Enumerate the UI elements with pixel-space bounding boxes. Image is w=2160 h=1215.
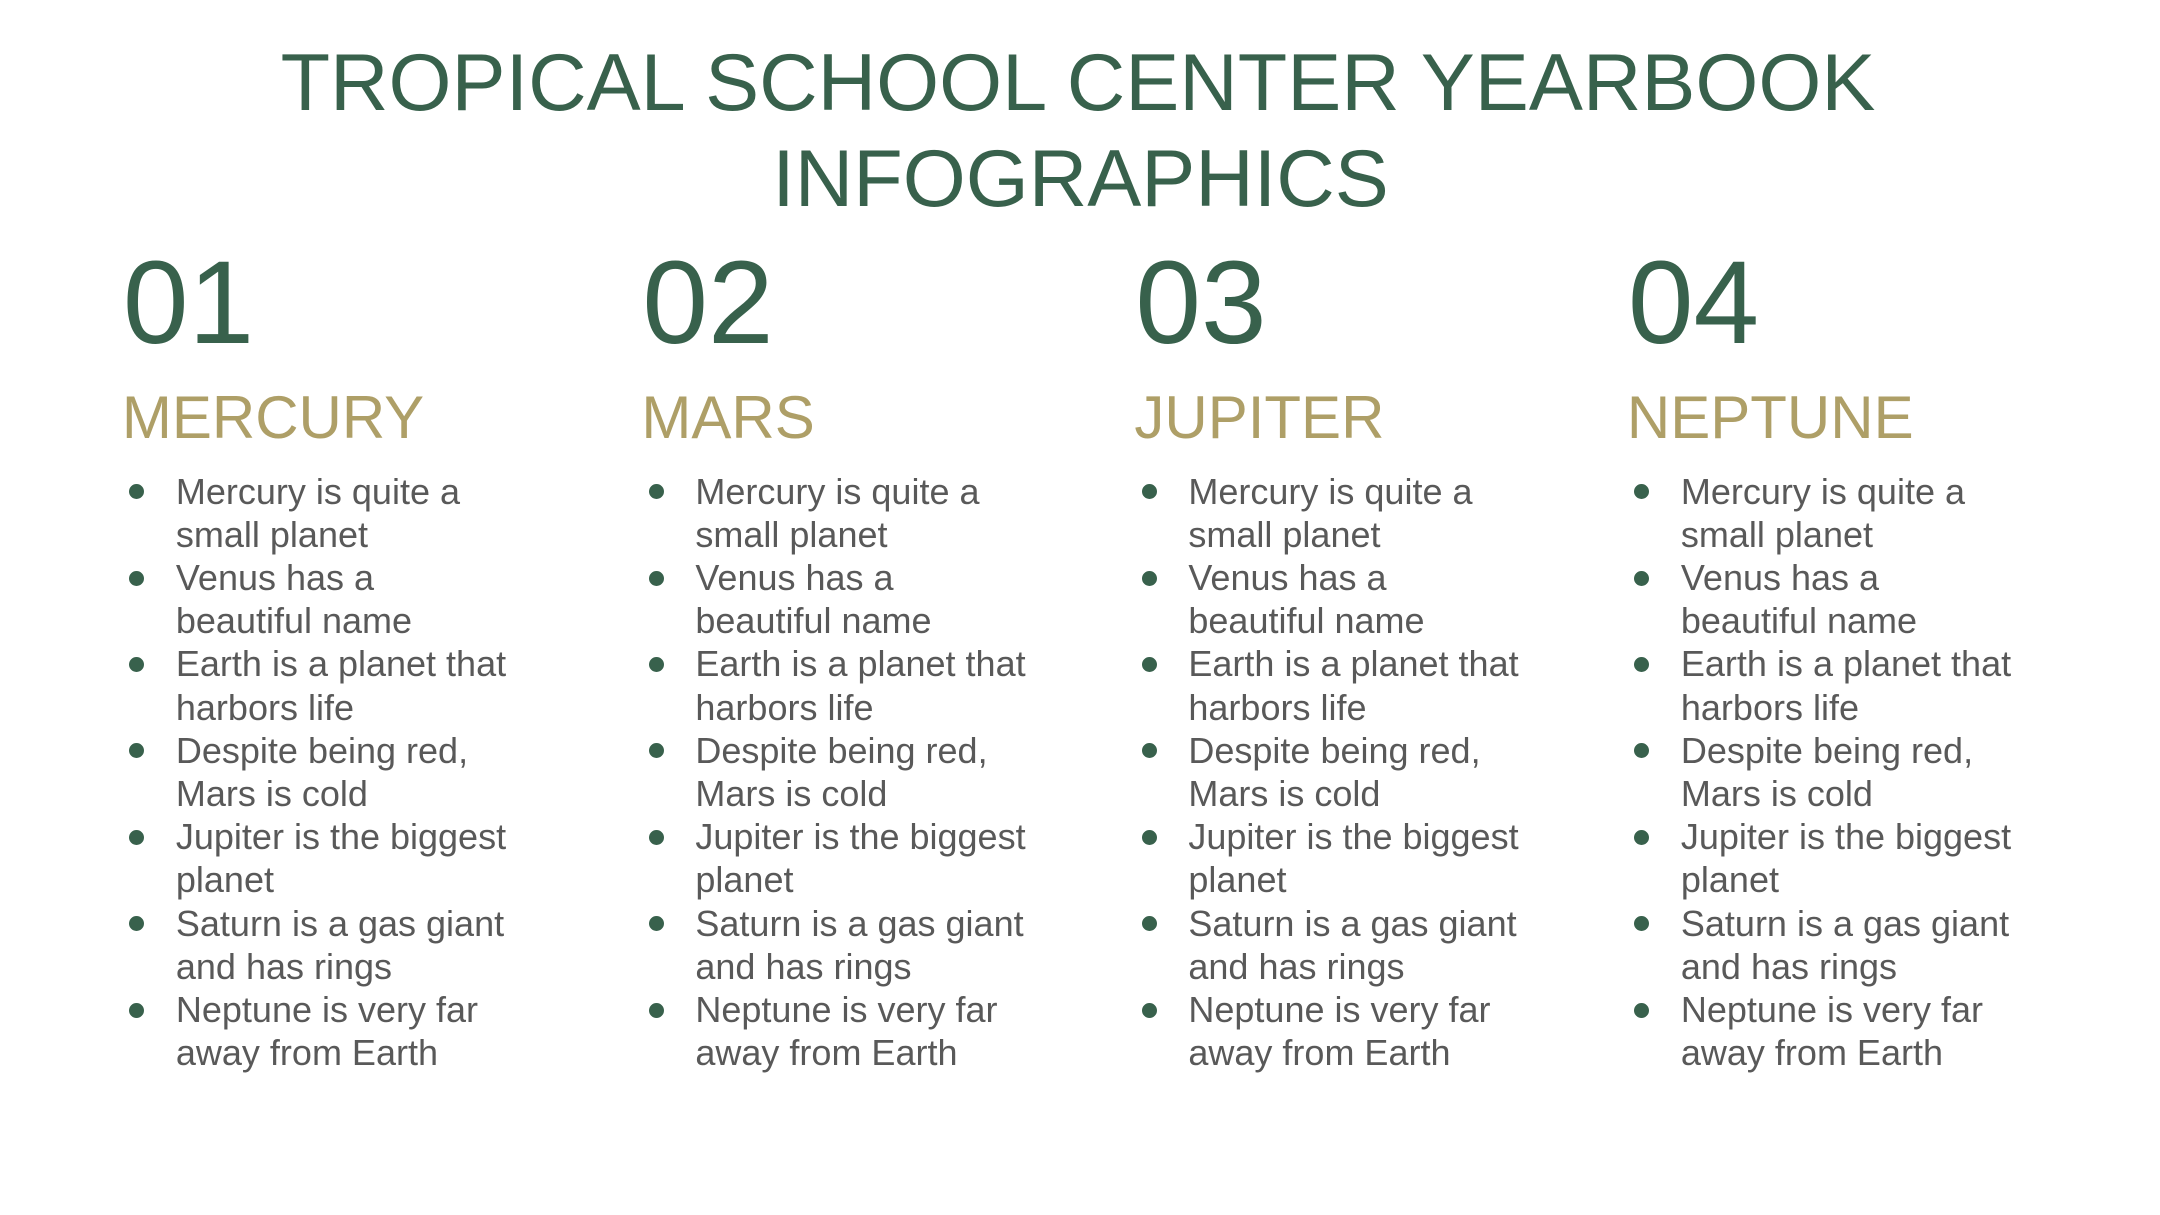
panel: 01 Mercury xyxy=(122,237,506,1073)
bullet list: Jupiter: Neptune is very far xyxy=(1188,989,1491,1030)
bullet list: Mars: and has rings xyxy=(695,946,912,987)
bullet list: Mars: Mercury is quite a xyxy=(695,471,980,512)
bullet list: Mercury xyxy=(129,471,506,1073)
heading: Mars: MARS xyxy=(641,384,815,451)
heading: Mercury: MERCURY xyxy=(122,384,424,451)
panel: 02 Mars xyxy=(641,237,1026,1073)
bullet list: Jupiter: Saturn is a gas giant xyxy=(1188,903,1517,944)
bullet list: Jupiter: Despite being red, xyxy=(1188,730,1481,771)
bullet list: Mercury: Mercury is quite a xyxy=(176,471,460,512)
number 01: 01 xyxy=(123,237,254,369)
bullet list: Neptune: Neptune is very far xyxy=(1681,989,1983,1030)
bullet list: Jupiter: and has rings xyxy=(1188,946,1405,987)
bullet list: Neptune: Mars is cold xyxy=(1681,773,1873,814)
panel: 04 Neptune xyxy=(1627,237,2011,1073)
bullet list: Mars: Venus has a xyxy=(695,557,894,598)
bullet list: Jupiter: Mars is cold xyxy=(1188,773,1380,814)
bullet list: Mars: away from Earth xyxy=(695,1032,957,1073)
number 03: 03 xyxy=(1135,237,1267,369)
bullet list: Jupiter: harbors life xyxy=(1188,687,1366,728)
bullet list: Mercury: Venus has a xyxy=(176,557,374,598)
number 02: 02 xyxy=(642,237,774,369)
bullet list: Mars: Despite being red, xyxy=(695,730,988,771)
number 04: 04 xyxy=(1628,237,1759,369)
bullet list: Neptune: harbors life xyxy=(1681,687,1859,728)
bullet list: Mars: Mars is cold xyxy=(695,773,887,814)
bullet list: Mars: Saturn is a gas giant xyxy=(695,903,1024,944)
heading: Neptune: NEPTUNE xyxy=(1627,384,1914,451)
bullet list: Mars: Earth is a planet that xyxy=(695,643,1026,684)
bullet list: Mars: harbors life xyxy=(695,687,873,728)
bullet list: Neptune: Mercury is quite a xyxy=(1681,471,1965,512)
bullet list: Mars: small planet xyxy=(695,514,887,555)
bullet list: Mercury: away from Earth xyxy=(176,1032,438,1073)
bullet list: Mercury: planet xyxy=(176,859,274,900)
bullet list: Mercury: beautiful name xyxy=(176,600,412,641)
bullet list: Mercury: Saturn is a gas giant xyxy=(176,903,504,944)
bullet list: Jupiter: Venus has a xyxy=(1188,557,1387,598)
bullet list: Mercury: Mars is cold xyxy=(176,773,368,814)
bullet list: Neptune: beautiful name xyxy=(1681,600,1917,641)
title: TROPICAL SCHOOL CENTER YEARBOOK xyxy=(281,38,1875,128)
bullet list: Mars: Jupiter is the biggest xyxy=(695,816,1026,857)
panel: 03 Jupiter xyxy=(1134,237,1519,1073)
bullet list: Neptune: Jupiter is the biggest xyxy=(1681,816,2011,857)
bullet list: Jupiter: Jupiter is the biggest xyxy=(1188,816,1519,857)
bullet list: Neptune: and has rings xyxy=(1681,946,1897,987)
bullet list: Jupiter: away from Earth xyxy=(1188,1032,1450,1073)
bullet list: Mars: Neptune is very far xyxy=(695,989,998,1030)
bullet list: Mercury: and has rings xyxy=(176,946,392,987)
bullet list: Neptune: small planet xyxy=(1681,514,1873,555)
bullet list: Jupiter: planet xyxy=(1188,859,1286,900)
bullet list: Neptune: Earth is a planet that xyxy=(1681,643,2011,684)
bullet list: Mars: planet xyxy=(695,859,793,900)
bullet list: Jupiter: Mercury is quite a xyxy=(1188,471,1472,512)
bullet list: Mercury: Jupiter is the biggest xyxy=(176,816,506,857)
bullet list: Neptune: Venus has a xyxy=(1681,557,1879,598)
bullet list: Neptune: Saturn is a gas giant xyxy=(1681,903,2009,944)
bullet list: Mars: beautiful name xyxy=(695,600,932,641)
title xyxy=(281,38,1875,224)
bullet list: Jupiter: Earth is a planet that xyxy=(1188,643,1519,684)
bullet list: Jupiter: beautiful name xyxy=(1188,600,1425,641)
bullet list: Mercury: Earth is a planet that xyxy=(176,643,506,684)
bullet list: Neptune xyxy=(1634,471,2011,1073)
bullet list: Jupiter xyxy=(1142,471,1519,1073)
bullet list: Neptune: planet xyxy=(1681,859,1779,900)
bullet list: Neptune: away from Earth xyxy=(1681,1032,1943,1073)
bullet list: Neptune: Despite being red, xyxy=(1681,730,1973,771)
bullet list: Mars xyxy=(649,471,1026,1073)
title: INFOGRAPHICS xyxy=(772,134,1389,224)
bullet list: Jupiter: small planet xyxy=(1188,514,1380,555)
bullet list: Mercury: Neptune is very far xyxy=(176,989,478,1030)
bullet list: Mercury: Despite being red, xyxy=(176,730,468,771)
heading: Jupiter: JUPITER xyxy=(1134,384,1384,451)
bullet list: Mercury: small planet xyxy=(176,514,368,555)
bullet list: Mercury: harbors life xyxy=(176,687,354,728)
